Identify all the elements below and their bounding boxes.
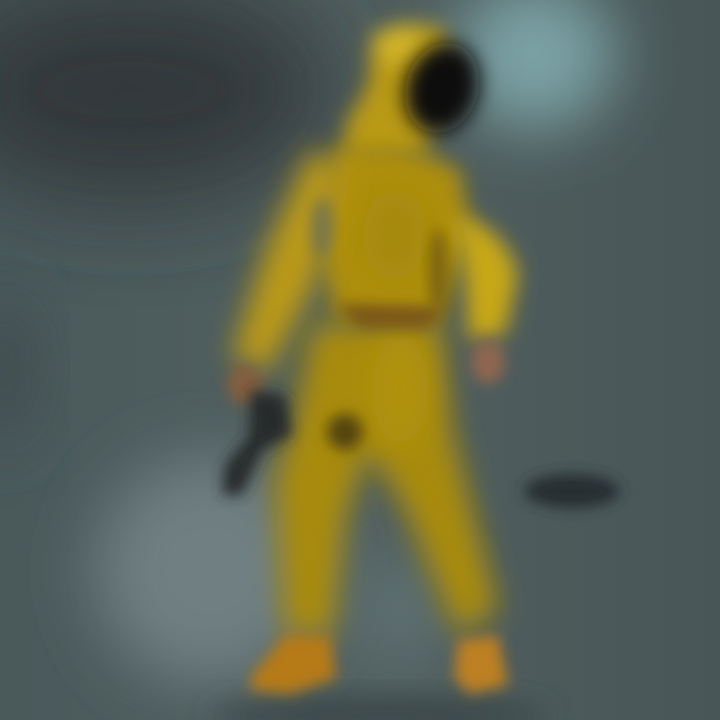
- legs: [275, 320, 498, 635]
- dark mark on right: [524, 474, 620, 508]
- left boot: [250, 635, 336, 694]
- left arm: [232, 150, 345, 372]
- right hand: [471, 340, 505, 384]
- figure: yellow suit: [232, 24, 518, 635]
- object in hand: [222, 390, 363, 495]
- torso: [318, 146, 470, 320]
- right boot: [454, 635, 508, 694]
- face opening: [394, 33, 490, 143]
- right arm: [455, 215, 518, 340]
- left hand: [227, 365, 263, 405]
- suit shading: [363, 190, 427, 280]
- belt: [335, 304, 445, 328]
- hood: [345, 24, 450, 160]
